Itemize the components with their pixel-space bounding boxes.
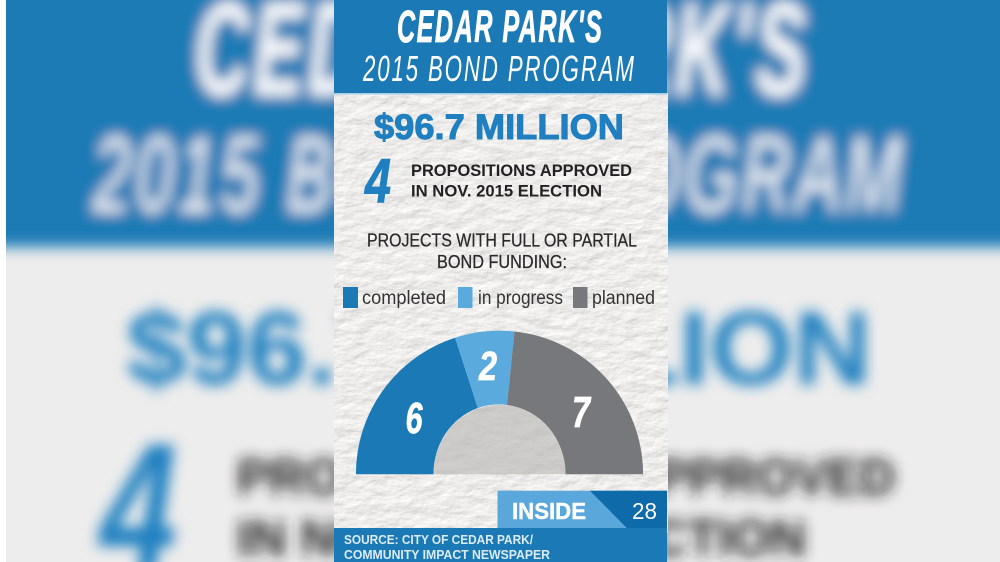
legend: completed: completed [362, 288, 446, 309]
chart heading: BOND FUNDING: [437, 252, 567, 272]
segment: completed 6 [356, 338, 478, 474]
source footer: COMMUNITY IMPACT NEWSPAPER [344, 547, 551, 562]
title: Cedar Park's: CEDAR PARK'S [397, 1, 602, 52]
segment: in progress 2 [455, 331, 514, 408]
inside page tab [498, 491, 667, 529]
panel: paper background [334, 93, 667, 533]
source footer: SOURCE: CITY OF CEDAR PARK/ [344, 532, 533, 547]
chart heading [367, 230, 637, 272]
segment: in progress 2: 2 [478, 343, 497, 389]
legend [343, 287, 655, 309]
propositions text: PROPOSITIONS APPROVED [411, 161, 632, 180]
segment: completed 6: 6 [406, 394, 423, 443]
propositions text: IN NOV. 2015 ELECTION [411, 182, 602, 200]
legend: planned: planned [592, 288, 655, 309]
blurred backdrop: 2015 BOND PROGRAM [93, 114, 902, 234]
blurred backdrop: $96.7 MILLION [127, 291, 872, 407]
source footer [334, 528, 667, 562]
inside page tab: INSIDE [512, 498, 586, 524]
headline amount: $96.7 MILLION [374, 108, 624, 147]
header band [334, 0, 667, 94]
legend: planned [573, 287, 655, 309]
blurred backdrop: PROPOSITIONS APPROVED [237, 448, 895, 505]
segment: planned 7: 7 [572, 388, 592, 437]
legend: in progress: in progress [478, 288, 563, 309]
inside page tab: 28 [632, 498, 657, 524]
subtitle: 2015 Bond Program: 2015 BOND PROGRAM [362, 50, 634, 89]
half-donut chart [356, 331, 643, 474]
segment: planned 7 [507, 332, 643, 474]
propositions text [411, 161, 632, 200]
big number 4: 4 [363, 147, 391, 216]
chart heading: PROJECTS WITH FULL OR PARTIAL [367, 230, 637, 250]
chart centre [434, 405, 566, 474]
